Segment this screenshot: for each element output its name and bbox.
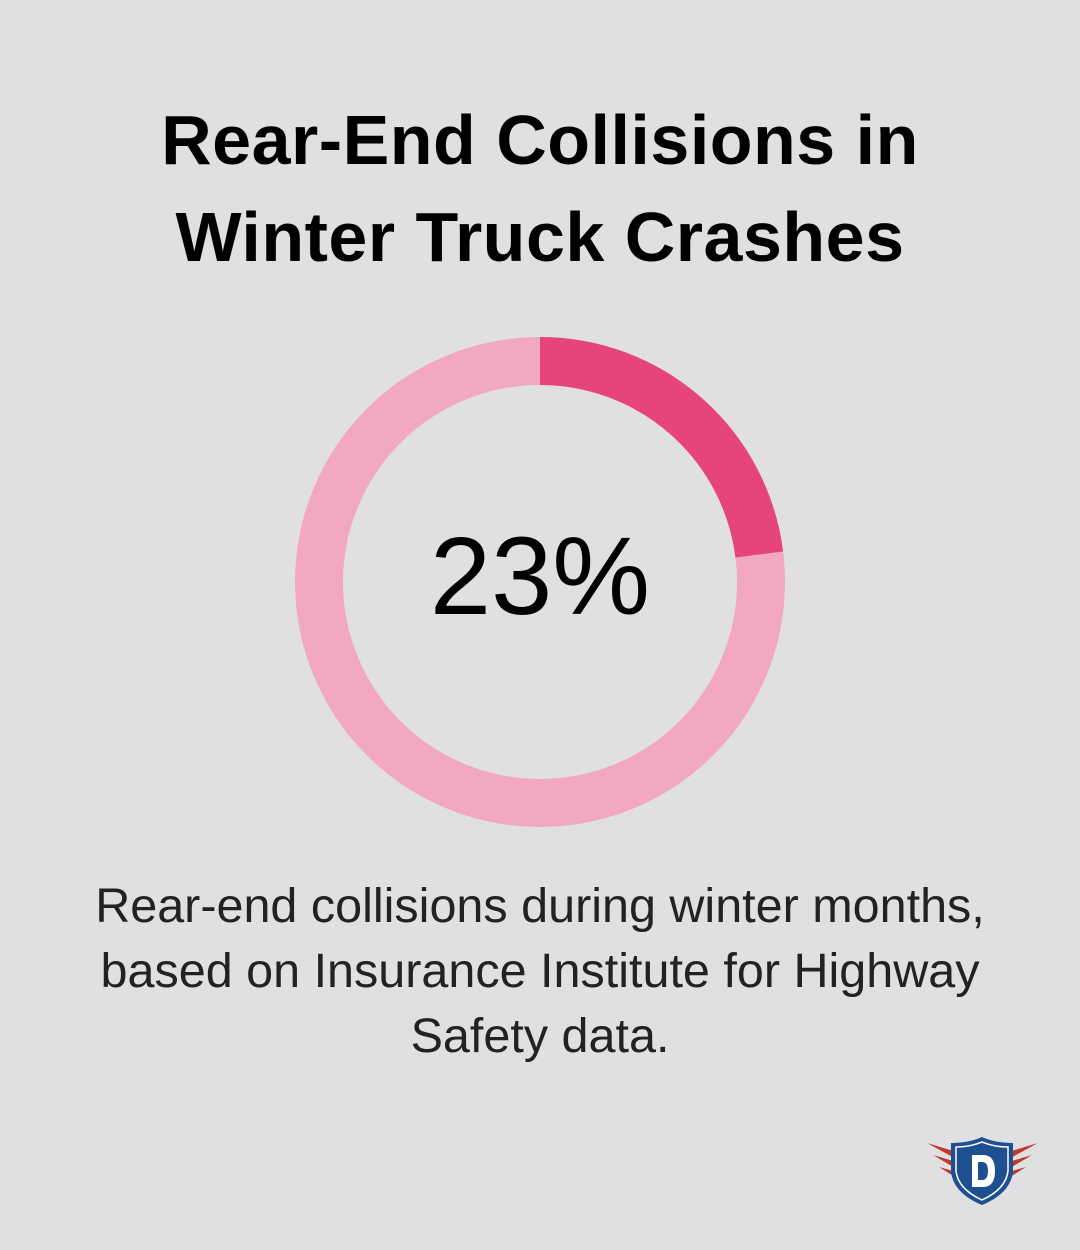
description: [95, 879, 985, 1063]
title: [161, 101, 919, 276]
donut chart: 23%: [430, 515, 650, 638]
description: Rear-end collisions during winter months,: [95, 879, 985, 933]
title: Rear-End Collisions in: [161, 101, 919, 179]
description: based on Insurance Institute for Highway: [101, 944, 979, 998]
title: Winter Truck Crashes: [175, 198, 905, 276]
description: Safety data.: [411, 1009, 669, 1063]
icon: logo: [927, 1137, 1038, 1205]
